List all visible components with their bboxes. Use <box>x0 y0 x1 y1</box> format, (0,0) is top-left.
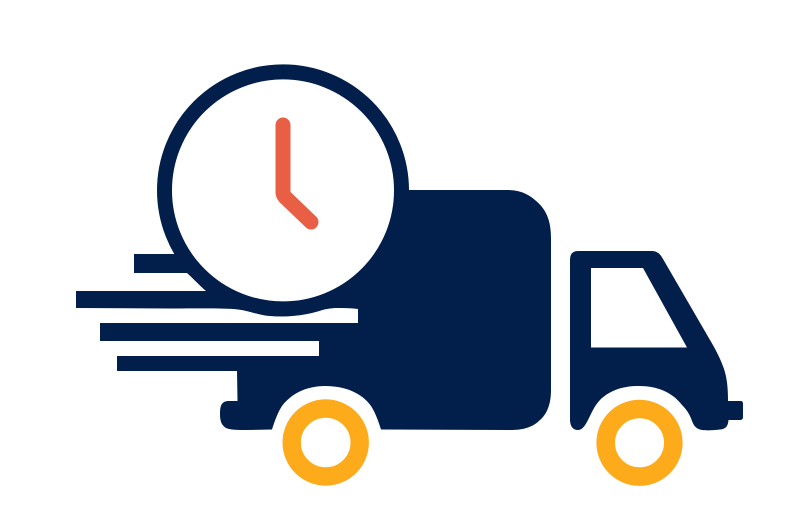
clock face <box>164 72 402 309</box>
clock hands <box>283 125 311 222</box>
rear wheel <box>292 408 360 476</box>
truck cargo body with speed lines <box>76 190 551 430</box>
truck cab <box>570 251 743 430</box>
cab window <box>591 268 687 348</box>
clock <box>164 72 402 309</box>
front wheel <box>606 409 673 477</box>
